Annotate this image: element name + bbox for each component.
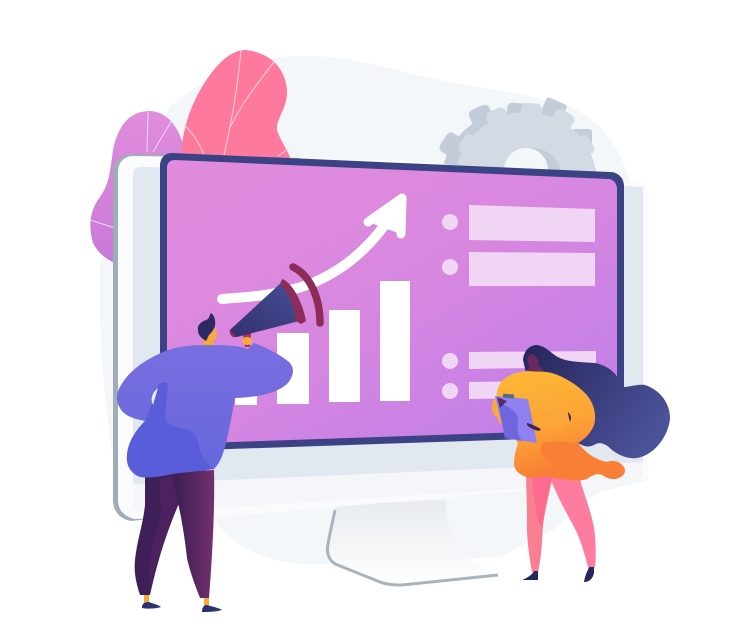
clipboard <box>495 394 571 443</box>
leaf: purple <box>90 111 186 263</box>
man: head <box>198 313 217 349</box>
background blob <box>100 56 648 564</box>
list rows <box>442 205 596 399</box>
man with megaphone <box>117 267 320 612</box>
bar chart <box>235 281 410 405</box>
man: feet <box>142 595 222 612</box>
woman: feet <box>522 567 594 582</box>
woman: face <box>522 354 545 373</box>
man: trousers <box>135 470 214 598</box>
monitor screen <box>160 153 624 451</box>
monitor body <box>113 154 648 521</box>
woman: hair <box>523 345 670 458</box>
woman: sweater <box>492 371 625 480</box>
monitor stand <box>327 500 498 585</box>
woman: trousers <box>526 475 596 572</box>
gear <box>438 96 597 254</box>
man: sweater <box>117 343 293 477</box>
leaf: pink <box>182 50 291 160</box>
rising arrow <box>222 198 402 299</box>
megaphone <box>230 267 320 347</box>
woman with clipboard <box>492 345 670 582</box>
